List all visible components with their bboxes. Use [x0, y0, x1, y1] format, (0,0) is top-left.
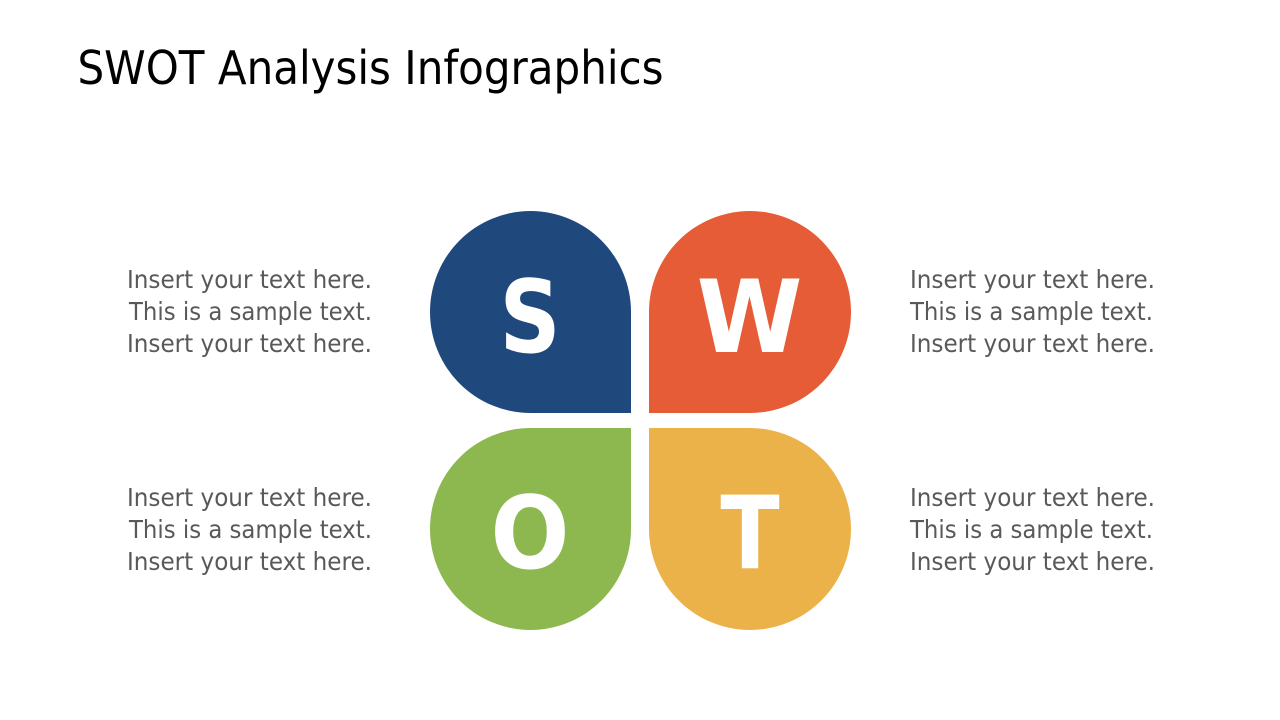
text block: strengths: Insert your text here.	[127, 265, 372, 294]
text block: opportunities: This is a sample text.	[128, 515, 372, 544]
text block: opportunities	[127, 483, 372, 576]
petal: W: W	[697, 260, 802, 377]
text block: opportunities: Insert your text here.	[127, 483, 372, 512]
petal: O	[430, 428, 631, 630]
text block: strengths: This is a sample text.	[128, 297, 372, 326]
petal: W	[649, 211, 851, 413]
title: SWOT Analysis Infographics	[78, 41, 664, 95]
text block: weaknesses: Insert your text here.	[910, 329, 1155, 358]
petal: S: S	[499, 258, 561, 376]
petal: T	[649, 428, 851, 630]
text block: threats	[909, 483, 1155, 576]
text block: weaknesses: This is a sample text.	[909, 297, 1153, 326]
text block: weaknesses: Insert your text here.	[910, 265, 1155, 294]
text block: strengths	[127, 265, 372, 358]
text block: threats: Insert your text here.	[910, 547, 1155, 576]
text block: weaknesses	[909, 265, 1155, 358]
text block: threats: This is a sample text.	[909, 515, 1153, 544]
petal: T: T	[720, 476, 780, 593]
text block: threats: Insert your text here.	[910, 483, 1155, 512]
text block: strengths: Insert your text here.	[127, 329, 372, 358]
text block: opportunities: Insert your text here.	[127, 547, 372, 576]
petal: O: O	[491, 474, 569, 592]
petal: S	[430, 211, 631, 413]
